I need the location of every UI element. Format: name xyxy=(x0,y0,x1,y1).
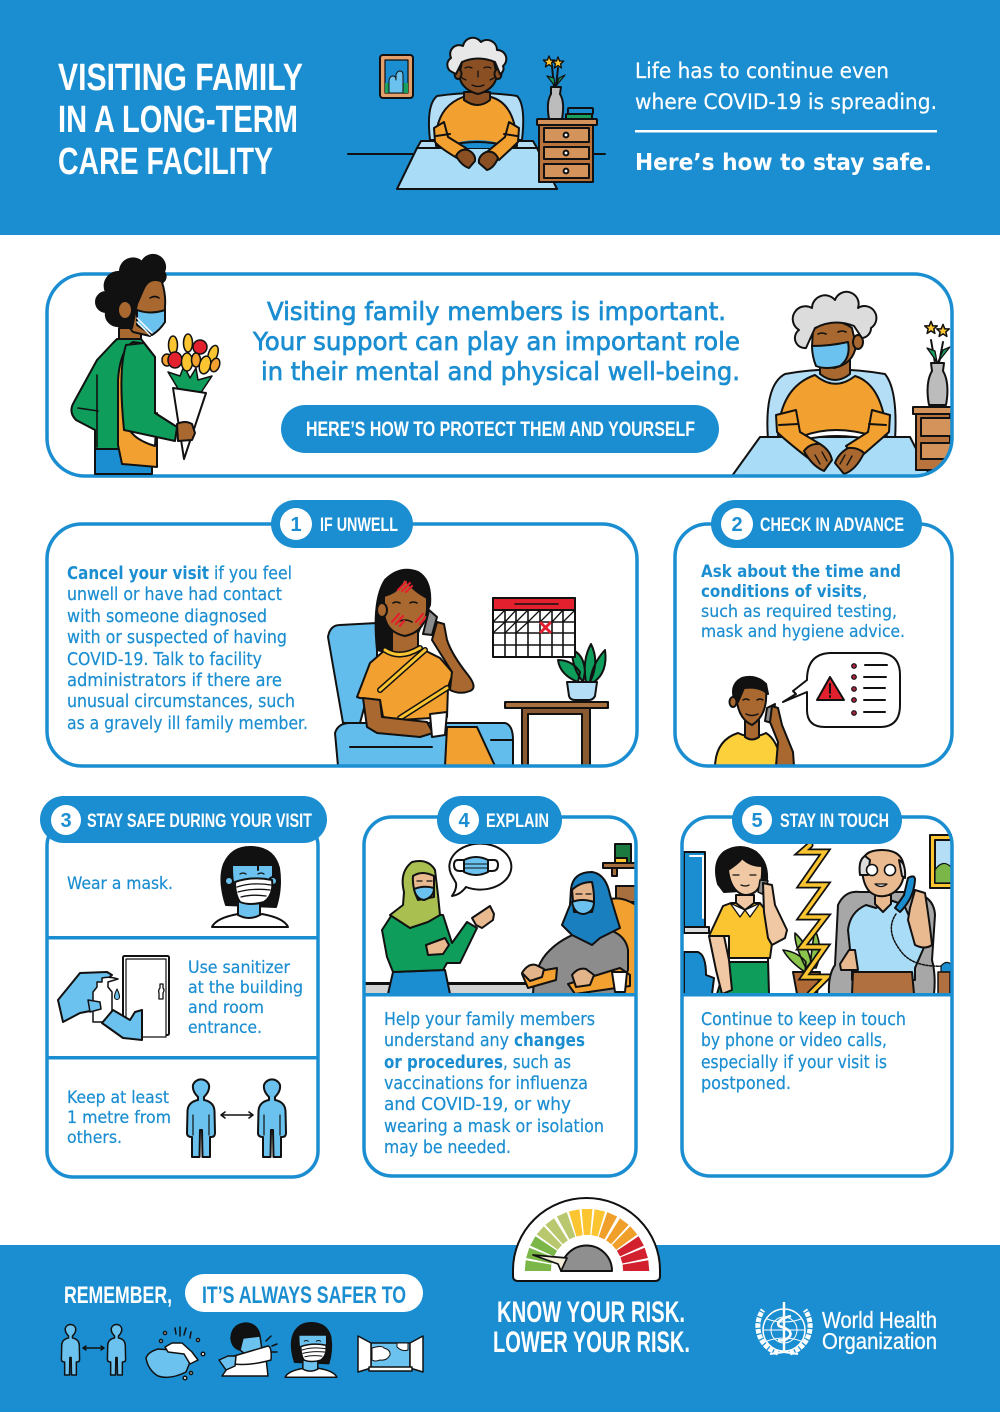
know your risk text: LOWER YOUR RISK. xyxy=(493,1326,690,1359)
intro message: in their mental and physical well-being. xyxy=(261,357,740,386)
panel border xyxy=(47,524,637,766)
badge 1: IF UNWELL xyxy=(320,515,398,536)
text: explain: , such as xyxy=(503,1053,571,1073)
text: keep distance: Keep at least xyxy=(67,1088,169,1108)
badge 2 xyxy=(711,500,922,548)
know your risk text: KNOW YOUR RISK. xyxy=(497,1296,685,1329)
panel 4: explain xyxy=(364,796,636,1176)
text: keep distance xyxy=(67,1088,171,1148)
badge 5: STAY IN TOUCH xyxy=(780,811,889,832)
panel 5: stay in touch xyxy=(682,796,952,1176)
intro message: Your support can play an important role xyxy=(252,327,740,356)
title: VISITING FAMILY xyxy=(58,57,303,99)
badge 4 xyxy=(437,796,562,844)
badge 1: 1 xyxy=(290,514,302,536)
illustration: man on phone with speech bubble xyxy=(715,653,900,766)
text: check in advance: conditions of visits xyxy=(701,582,862,602)
gauge hub and needle xyxy=(533,1246,612,1271)
know your risk text xyxy=(493,1296,690,1359)
icon: sanitizer and door xyxy=(58,956,169,1040)
panel border xyxy=(675,524,952,766)
badge 1 xyxy=(271,500,413,548)
World Health Organization wordmark: World Health xyxy=(822,1307,937,1333)
pill heading xyxy=(281,405,719,453)
text: explain: Help your family members xyxy=(384,1010,595,1030)
text: if unwell: administrators if there are xyxy=(67,671,282,691)
badge 5: 5 xyxy=(751,810,763,832)
illustration: visitor with flowers xyxy=(71,255,222,474)
gauge segments xyxy=(525,1209,649,1273)
text: explain xyxy=(384,1010,604,1158)
World Health Organization wordmark: Organization xyxy=(822,1328,937,1354)
intro message: Visiting family members is important. xyxy=(267,297,726,326)
World Health Organization wordmark xyxy=(822,1307,937,1354)
remember heading: IT’S ALWAYS SAFER TO xyxy=(202,1282,406,1309)
text: if unwell: unwell or have had contact xyxy=(67,585,282,605)
badge 3 xyxy=(40,796,327,843)
text: wear a mask: Wear a mask. xyxy=(67,874,173,894)
remember heading: REMEMBER, xyxy=(64,1282,172,1309)
text: stay in touch: Continue to keep in touch xyxy=(701,1010,906,1030)
panel border xyxy=(682,817,952,1176)
illustration: older woman with mask in bed xyxy=(732,292,953,476)
panel border xyxy=(47,274,952,476)
text: if unwell: with someone diagnosed xyxy=(67,607,267,627)
header message: where COVID-19 is spreading. xyxy=(635,90,937,115)
text: explain: changes xyxy=(514,1031,585,1051)
icon: wear mask xyxy=(285,1323,337,1377)
text: use sanitizer: Use sanitizer xyxy=(188,958,290,978)
badge 4: 4 xyxy=(458,810,470,832)
text: check in advance xyxy=(701,562,905,642)
badge 2: 2 xyxy=(731,514,743,536)
illustration: older woman in bed xyxy=(348,38,605,189)
remember heading xyxy=(64,1274,423,1312)
text: if unwell: unusual circumstances, such xyxy=(67,692,295,712)
pill heading: HERE’S HOW TO PROTECT THEM AND YOURSELF xyxy=(306,418,695,441)
header message: Here’s how to stay safe. xyxy=(635,150,932,176)
text: check in advance: , xyxy=(862,582,867,602)
icon: two people one metre apart xyxy=(187,1079,286,1157)
text: stay in touch: by phone or video calls, xyxy=(701,1031,887,1051)
text: stay in touch: especially if your visit is xyxy=(701,1053,887,1073)
badge 2: CHECK IN ADVANCE xyxy=(760,515,904,536)
WHO logo xyxy=(758,1302,810,1354)
badge 4: EXPLAIN xyxy=(486,811,549,832)
panel border xyxy=(364,817,636,1176)
text: use sanitizer: and room xyxy=(188,998,264,1018)
header band xyxy=(0,0,1000,235)
text: keep distance: others. xyxy=(67,1128,122,1148)
intro message xyxy=(252,297,740,453)
text: stay in touch xyxy=(701,1010,906,1094)
panel: intro xyxy=(47,255,953,476)
risk gauge xyxy=(513,1198,660,1281)
footer band xyxy=(0,1245,1000,1412)
title: CARE FACILITY xyxy=(58,141,273,183)
text: if unwell xyxy=(67,564,308,734)
badge 5 xyxy=(732,796,902,844)
badge 3: STAY SAFE DURING YOUR VISIT xyxy=(87,811,312,832)
illustration: two women talking about masks xyxy=(364,844,636,994)
icon: open window xyxy=(358,1336,423,1372)
panel 1: if unwell xyxy=(47,500,637,766)
text: explain: wearing a mask or isolation xyxy=(384,1117,604,1137)
title xyxy=(58,57,303,183)
text: explain: or procedures xyxy=(384,1053,503,1073)
icon: cough into elbow xyxy=(219,1323,277,1376)
illustration: two people on a phone call xyxy=(684,835,952,994)
text: if unwell: COVID-19. Talk to facility xyxy=(67,650,262,670)
text: check in advance: such as required testing, xyxy=(701,602,897,622)
text: if unwell: Cancel your visit xyxy=(67,564,209,584)
text: explain: understand any xyxy=(384,1031,509,1051)
text: keep distance: 1 metre from xyxy=(67,1108,171,1128)
text: if unwell: with or suspected of having xyxy=(67,628,287,648)
text: stay in touch: postponed. xyxy=(701,1074,791,1094)
header message xyxy=(635,59,937,176)
title: IN A LONG-TERM xyxy=(58,99,298,141)
text: explain: and COVID-19, or why xyxy=(384,1095,571,1115)
panel 2: check in advance xyxy=(675,500,952,766)
text: check in advance: mask and hygiene advice. xyxy=(701,622,905,642)
icon: keep distance xyxy=(61,1325,126,1375)
text: use sanitizer xyxy=(188,958,303,1038)
illustration: unwell woman on phone, calendar, plant xyxy=(328,570,608,766)
text: if unwell: as a gravely ill family member. xyxy=(67,714,308,734)
badge 3: 3 xyxy=(60,810,72,832)
text: use sanitizer: entrance. xyxy=(188,1018,262,1038)
header message: Life has to continue even xyxy=(635,59,889,84)
icon: woman wearing mask xyxy=(212,847,288,927)
text: if unwell: if you feel xyxy=(214,564,292,584)
text: explain: may be needed. xyxy=(384,1138,511,1158)
text: explain: vaccinations for influenza xyxy=(384,1074,588,1094)
panel 3: stay safe during your visit xyxy=(40,796,327,1177)
icon: washing hands xyxy=(146,1327,205,1380)
text: check in advance: Ask about the time and xyxy=(701,562,901,582)
text: use sanitizer: at the building xyxy=(188,978,303,998)
